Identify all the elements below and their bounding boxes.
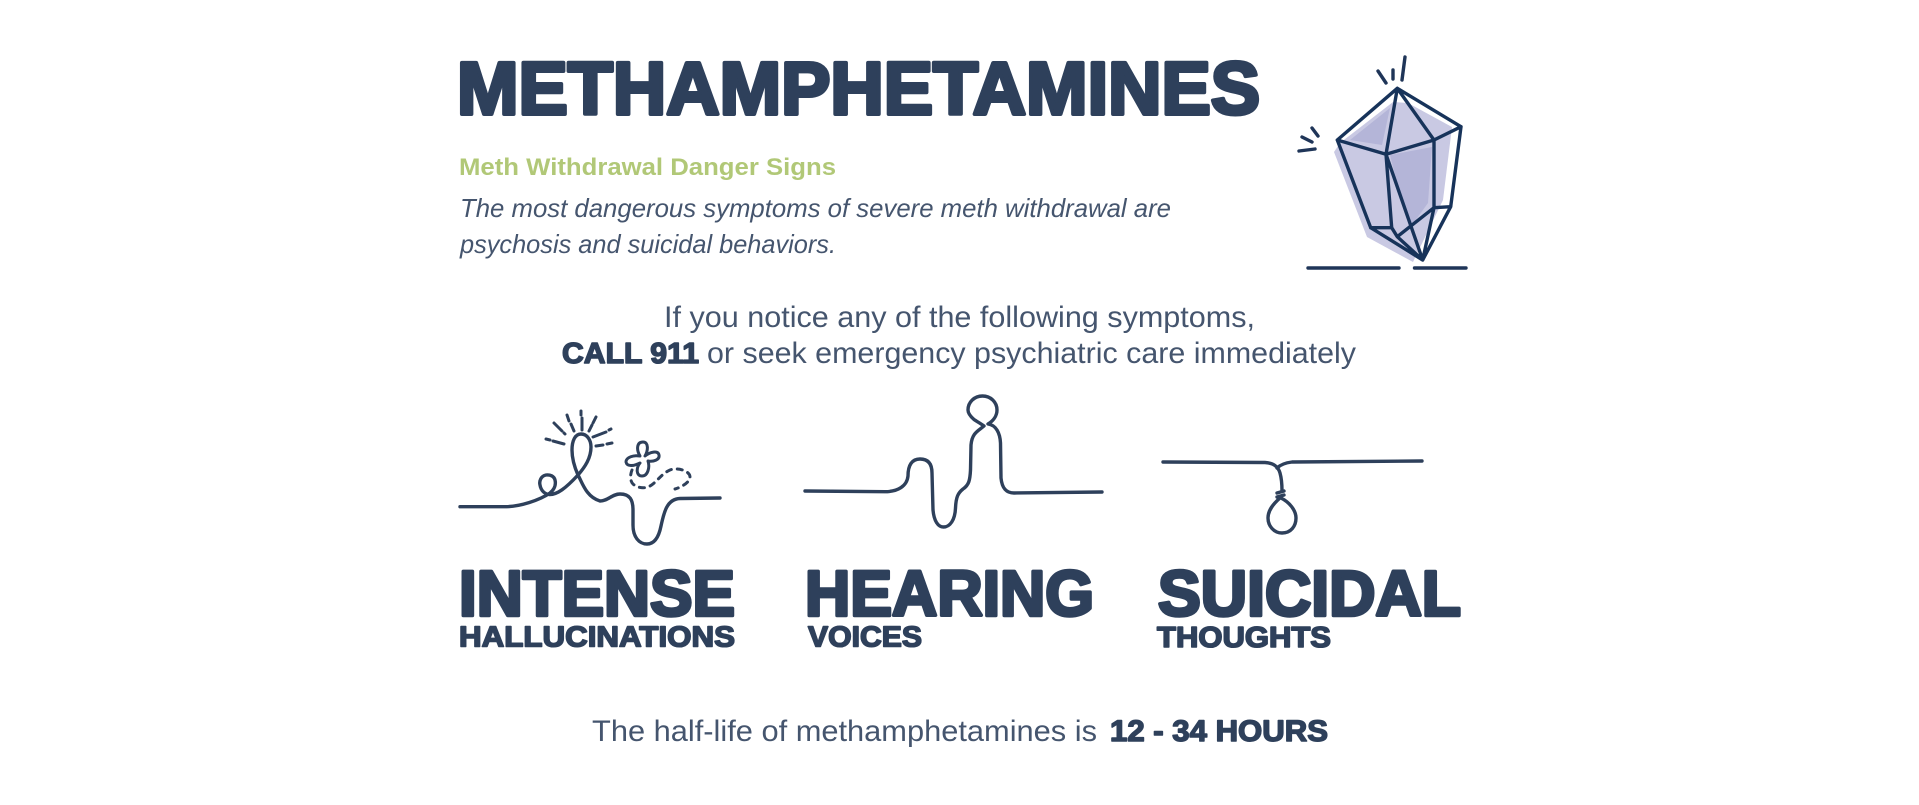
subheading: hallucinations: HALLUCINATIONS (459, 622, 735, 654)
icon: line with noose (1163, 461, 1422, 533)
intro text (459, 193, 1171, 259)
heading: hearing: HEARING (805, 558, 1094, 630)
panel: suicidal thoughts (1157, 461, 1461, 654)
call to action: If you notice any of the following symptoms, (664, 301, 1255, 334)
subheading: thoughts: THOUGHTS (1157, 622, 1331, 654)
half-life footer (592, 715, 1328, 748)
icon: hallucination line with light bulb and butterfly (460, 411, 720, 544)
half-life footer: 12 - 34 HOURS (1110, 715, 1328, 748)
heading: suicidal: SUICIDAL (1158, 558, 1461, 630)
panel: hearing voices (805, 396, 1102, 654)
intro text: psychosis and suicidal behaviors. (459, 229, 836, 259)
call to action (562, 301, 1356, 370)
subheading: voices: VOICES (808, 622, 922, 654)
title: METHAMPHETAMINES (457, 47, 1260, 130)
intro text: The most dangerous symptoms of severe meth withdrawal are (460, 193, 1171, 223)
call to action: or seek emergency psychiatric care immediately (707, 337, 1356, 370)
call to action: CALL 911 (562, 338, 699, 370)
heading: intense: INTENSE (459, 558, 735, 630)
subtitle: Meth Withdrawal Danger Signs (459, 154, 836, 181)
icon: line with person and head (805, 396, 1102, 527)
half-life footer: The half-life of methamphetamines is (592, 715, 1097, 748)
icon: crystal (1299, 57, 1466, 268)
panel: intense hallucinations (459, 411, 735, 654)
